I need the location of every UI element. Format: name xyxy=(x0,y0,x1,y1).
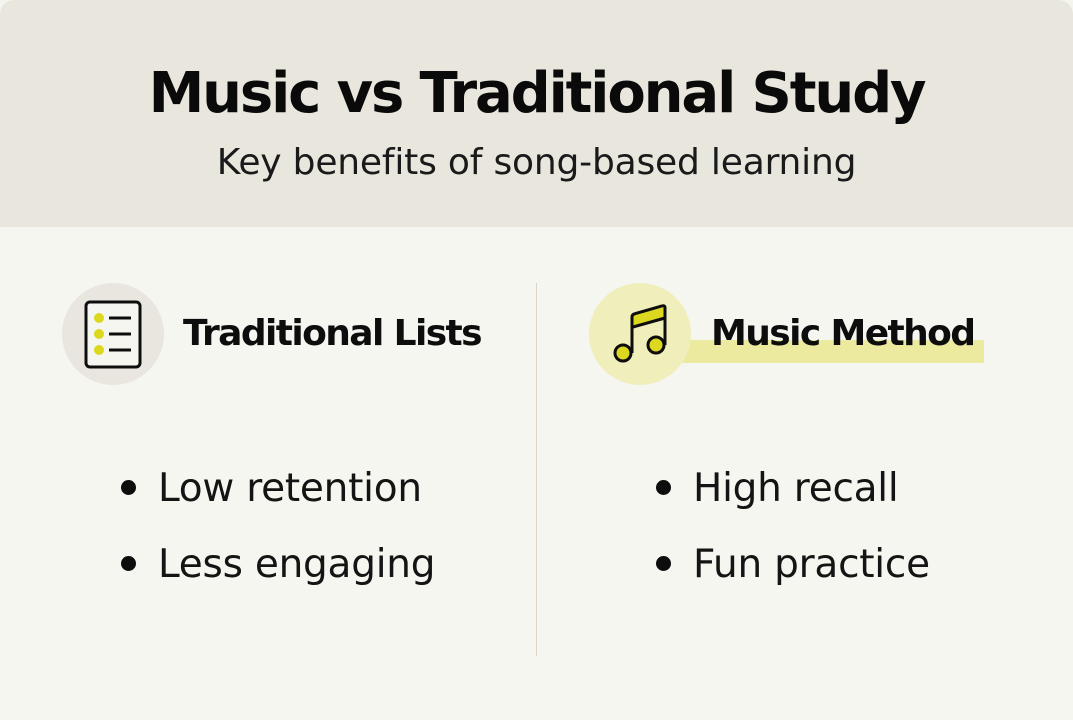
bullet: low retention: Low retention xyxy=(158,466,422,511)
panel: traditional lists xyxy=(62,283,481,587)
heading: music method: Music Method xyxy=(711,313,974,354)
icon: music note xyxy=(589,283,691,385)
bullet list: music xyxy=(656,466,930,587)
subtitle: Key benefits of song-based learning xyxy=(217,142,856,183)
header band xyxy=(0,0,1073,227)
panel: music method xyxy=(589,283,984,587)
icon: checklist xyxy=(62,283,164,385)
title: Music vs Traditional Study xyxy=(149,61,924,126)
highlight bar xyxy=(679,340,984,363)
heading: traditional lists: Traditional Lists xyxy=(183,313,481,354)
center divider xyxy=(536,283,537,656)
bullet: fun practice: Fun practice xyxy=(693,542,930,587)
bullet list: traditional xyxy=(121,466,435,587)
bullet: high recall: High recall xyxy=(693,466,898,511)
bullet: less engaging: Less engaging xyxy=(158,542,435,587)
